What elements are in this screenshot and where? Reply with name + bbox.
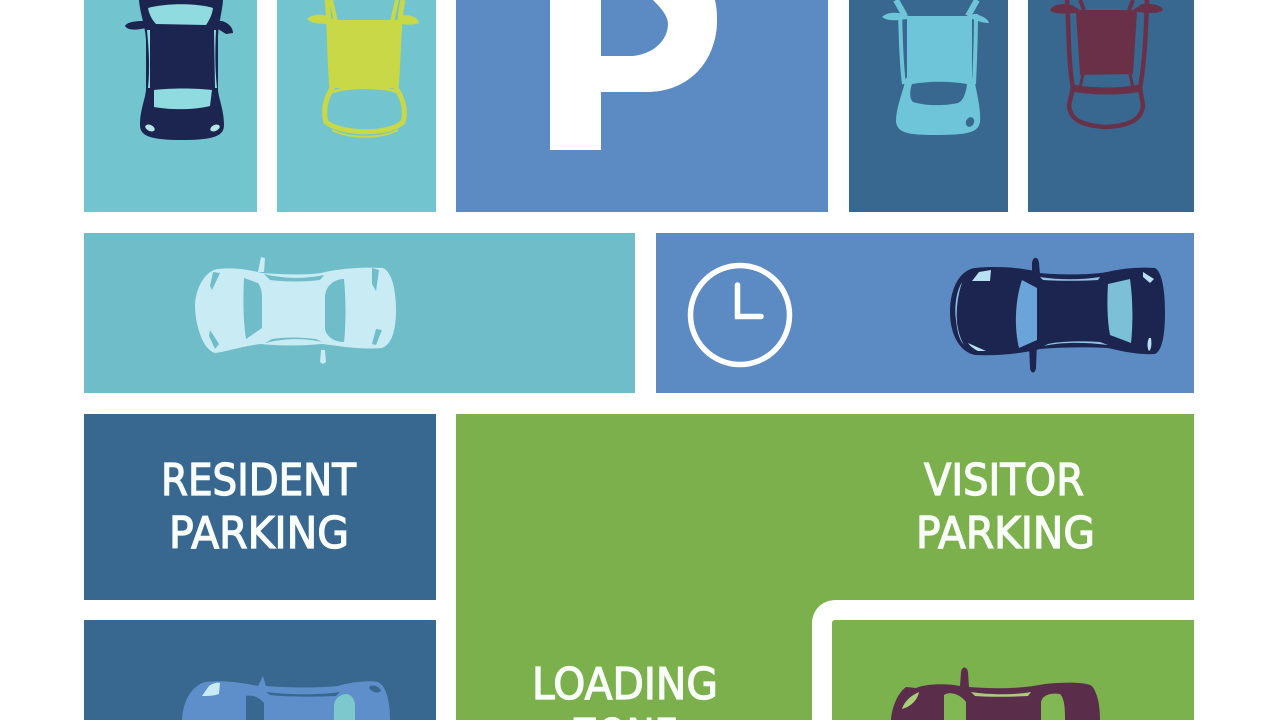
icon: letter P (550, 0, 717, 150)
icon: navy car facing left (950, 258, 1165, 372)
icon: maroon car (891, 668, 1100, 720)
heading: resident parking: PARKING (169, 508, 349, 559)
icon: navy car top view (125, 0, 233, 140)
panel: blue parking sign (456, 0, 828, 212)
heading: visitor parking (916, 455, 1095, 559)
heading: resident parking: RESIDENT (161, 455, 356, 506)
panel: wide blue bay with clock (656, 233, 1194, 393)
heading: loading zone: LOADING (532, 659, 718, 710)
panel: resident parking (84, 414, 436, 600)
panel: inset green bay with white corner border (812, 600, 1194, 720)
icon: clock (690, 266, 790, 364)
panel: wide teal bay (84, 233, 635, 393)
icon: light blue car top view (882, 0, 989, 135)
icon: yellow car top view (307, 0, 419, 137)
icon: pale car side-on top view (195, 257, 396, 364)
icon: blue car (182, 676, 390, 720)
panel: visitor parking and loading zone (456, 414, 1194, 720)
heading: visitor parking: VISITOR (924, 455, 1084, 506)
heading: visitor parking: PARKING (916, 508, 1095, 559)
panel: teal bay with yellow car (277, 0, 436, 212)
panel: lower dark bay (84, 620, 436, 720)
panel: dark bay with light blue car (849, 0, 1008, 212)
icon: maroon car top view (1050, 0, 1163, 127)
panel: teal bay with navy car (84, 0, 257, 212)
panel: dark bay with maroon car (1028, 0, 1194, 212)
heading: resident parking (161, 455, 356, 559)
